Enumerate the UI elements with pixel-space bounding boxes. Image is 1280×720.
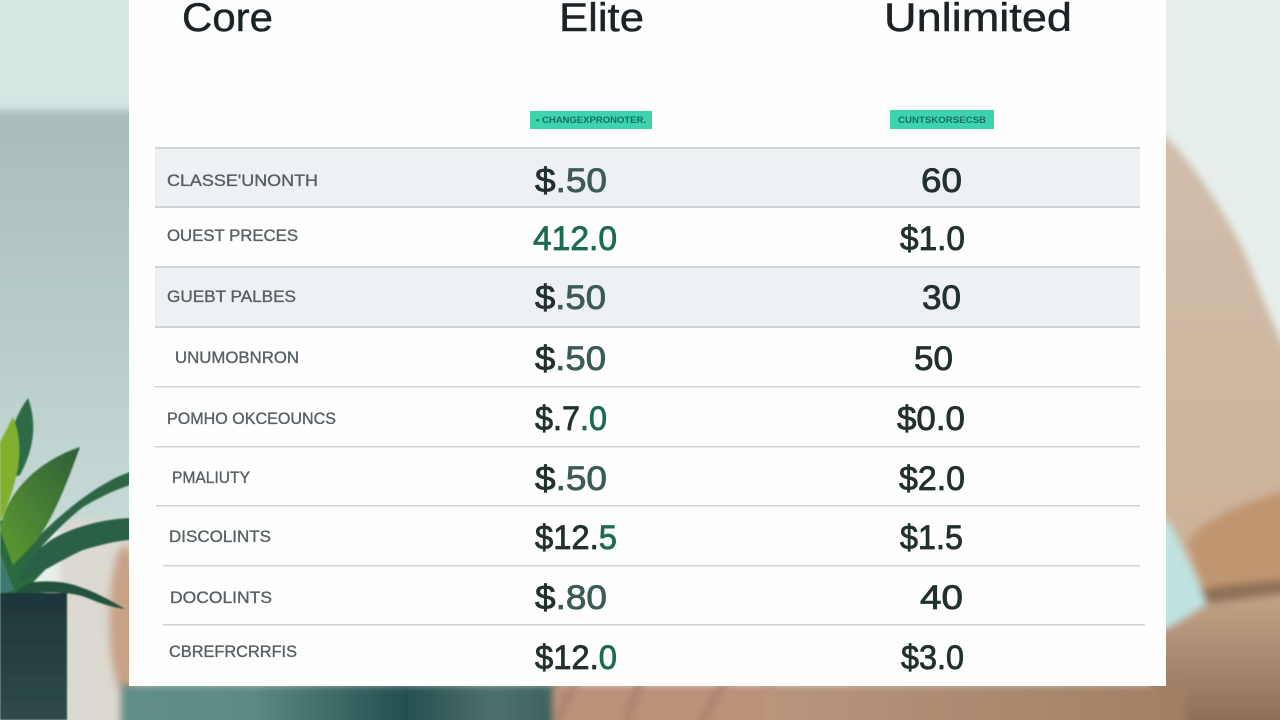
elite column values: $12.0 <box>535 639 617 677</box>
plan headings <box>182 0 1072 40</box>
elite column values: $.50 <box>535 162 607 200</box>
elite column values: $.50 <box>535 340 606 378</box>
unlimited column values: $1.0 <box>900 220 965 258</box>
elite column values: $.50 <box>535 460 607 498</box>
icon: plant pot <box>0 593 67 720</box>
unlimited column values: 30 <box>922 279 961 317</box>
unlimited column values: $2.0 <box>899 460 965 498</box>
elite column values: $.80 <box>535 579 607 617</box>
elite column values <box>533 162 617 677</box>
badge: elite: • CHANGEXPRONOTER. <box>536 115 646 125</box>
unlimited column values: $0.0 <box>897 400 965 438</box>
badge: unlimited: CUNTSKORSECSB <box>898 115 987 125</box>
unlimited column values: 40 <box>920 579 963 617</box>
unlimited column values: $3.0 <box>901 639 964 677</box>
elite column values: $.7.0 <box>535 400 607 438</box>
icon: potted plant <box>0 398 130 720</box>
table rows background <box>155 147 1145 626</box>
unlimited column values: 50 <box>914 340 953 378</box>
row labels: OUEST PRECES <box>167 226 298 245</box>
row labels: DOCOLINTS <box>170 588 272 607</box>
elite column values: $12.5 <box>535 519 617 557</box>
elite column values: 412.0 <box>533 220 617 258</box>
unlimited column values: $1.5 <box>900 519 963 557</box>
badge: unlimited <box>890 110 994 129</box>
row labels: CLASSE'UNONTH <box>167 171 318 190</box>
unlimited column values: 60 <box>921 162 962 200</box>
panel: pricing table <box>129 0 1166 686</box>
row labels: UNUMOBNRON <box>175 348 299 367</box>
badge: elite <box>530 111 652 129</box>
row labels: POMHO OKCEOUNCS <box>167 409 336 428</box>
row labels: CBREFRCRRFIS <box>169 642 297 661</box>
row labels: PMALIUTY <box>172 468 250 487</box>
row labels: DISCOLINTS <box>169 527 271 546</box>
row labels <box>167 171 336 661</box>
row labels: GUEBT PALBES <box>167 287 296 306</box>
elite column values: $.50 <box>535 279 606 317</box>
unlimited column values <box>897 162 965 677</box>
